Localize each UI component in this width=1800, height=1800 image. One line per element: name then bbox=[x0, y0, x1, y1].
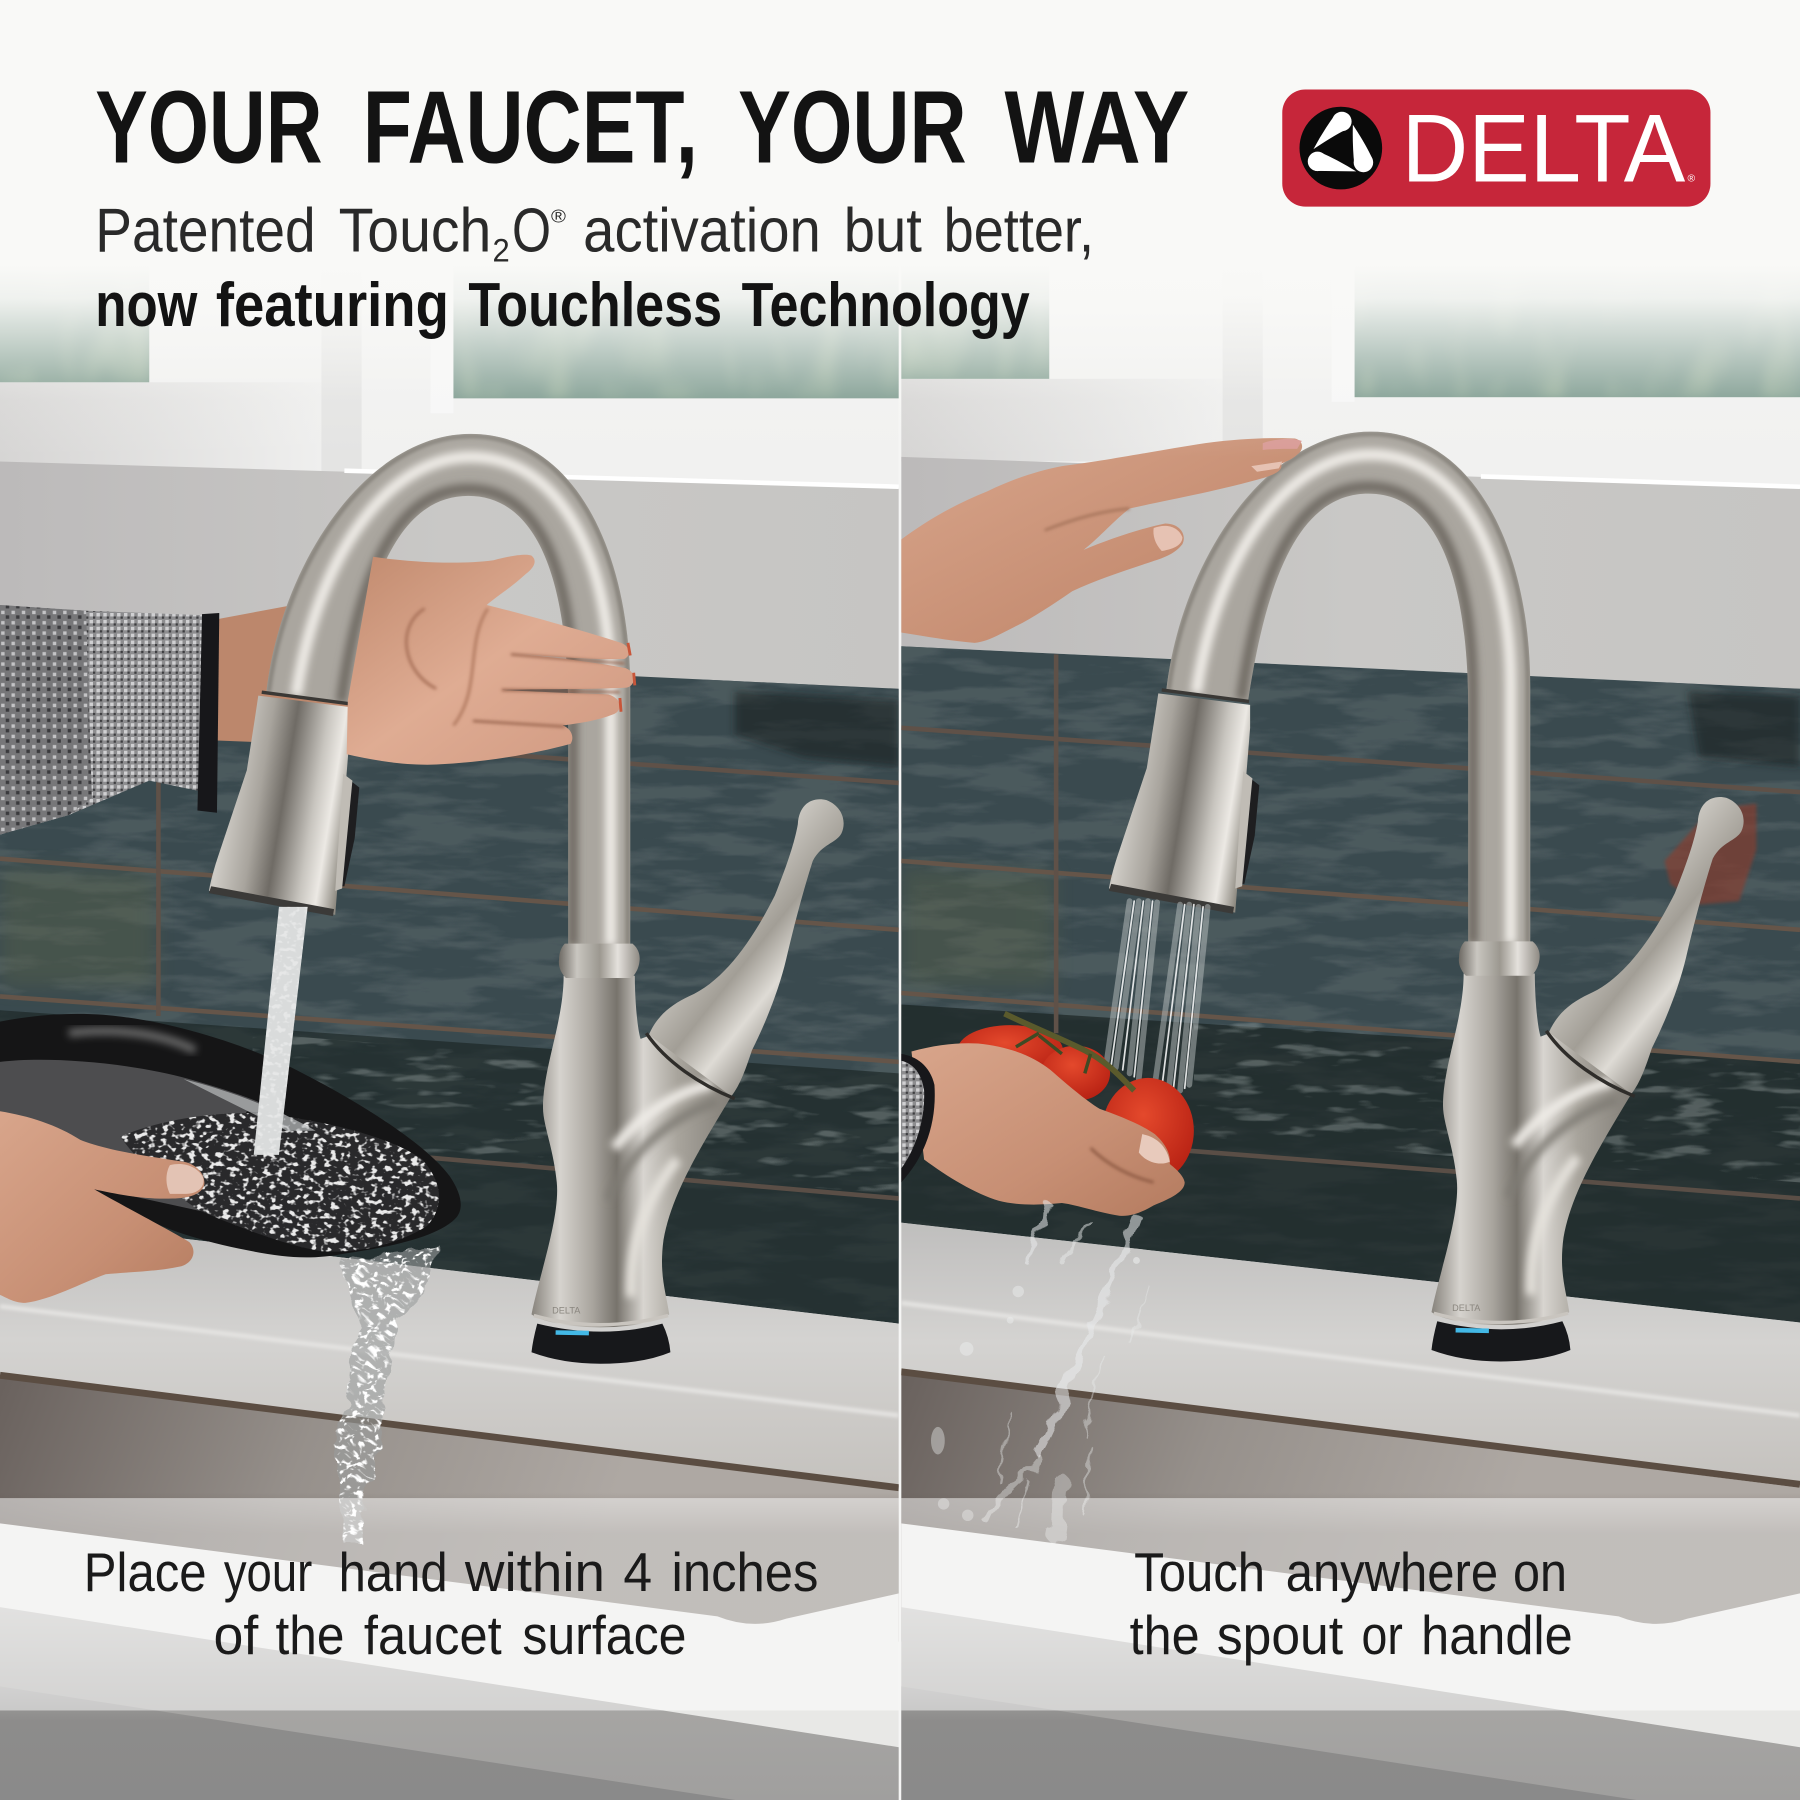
caption: touchless instruction bbox=[84, 1541, 818, 1666]
hand: holding tomatoes bbox=[911, 1043, 1185, 1216]
subtitle line 1: Patented bbox=[95, 196, 316, 265]
subtitle line 1 bbox=[95, 196, 1094, 269]
handle bbox=[649, 799, 844, 1096]
countertop bbox=[901, 1223, 1800, 1488]
handle ring bbox=[646, 1033, 735, 1099]
title: FAUCET, bbox=[363, 68, 698, 184]
subtitle line 1: ® bbox=[551, 206, 566, 227]
faucet: stainless pull-down kitchen faucet bbox=[209, 434, 844, 1364]
caption: touchless instruction: faucet bbox=[364, 1604, 502, 1666]
gooseneck spout bbox=[266, 434, 630, 946]
touch indicator light bbox=[556, 1330, 589, 1335]
caption: touchless instruction: Place bbox=[84, 1541, 207, 1603]
black base bbox=[532, 1324, 670, 1364]
sink rim bbox=[901, 1523, 1800, 1800]
caption band left bbox=[0, 1498, 899, 1710]
caption: touch instruction: on bbox=[1513, 1541, 1567, 1603]
sleeve pattern bbox=[901, 1061, 924, 1169]
window sill highlight bbox=[1481, 476, 1800, 487]
subtitle line 1: 2 bbox=[492, 233, 510, 269]
caption: touch instruction: spout bbox=[1217, 1604, 1343, 1666]
basin shadow bbox=[34, 1507, 899, 1624]
caption: touchless instruction: your bbox=[224, 1541, 312, 1603]
caption: touchless instruction: 4 bbox=[623, 1541, 652, 1603]
caption: touchless instruction: inches bbox=[672, 1541, 818, 1603]
caption: touch instruction: handle bbox=[1421, 1604, 1573, 1666]
window view: greenery bbox=[0, 288, 899, 398]
logo wordmark: DELTA bbox=[1402, 95, 1686, 202]
sink floor bbox=[0, 1703, 734, 1800]
caption: touchless instruction: within bbox=[464, 1541, 605, 1603]
water pooling on plate bbox=[121, 1113, 439, 1252]
window frame bbox=[901, 172, 1800, 494]
registered mark: ® bbox=[1688, 173, 1696, 184]
tile backsplash bbox=[901, 646, 1800, 1322]
spray head button bbox=[340, 776, 359, 886]
sink floor bbox=[901, 1686, 1800, 1800]
countertop bbox=[0, 1217, 899, 1490]
counter edge highlight bbox=[0, 1306, 899, 1415]
title: WAY bbox=[1004, 68, 1189, 184]
water stream from spray head bbox=[254, 907, 308, 1155]
title: YOUR bbox=[738, 68, 967, 184]
subtitle line 1: but bbox=[844, 196, 922, 265]
sink rim bbox=[0, 1523, 899, 1747]
subtitle line 2: Technology bbox=[742, 271, 1030, 340]
water falling from plate bbox=[333, 1246, 440, 1544]
subtitle line 1: O bbox=[512, 196, 551, 265]
caption: touchless instruction: surface bbox=[522, 1604, 686, 1666]
subtitle line 1: activation bbox=[583, 196, 821, 265]
subtitle line 2 bbox=[95, 271, 1030, 340]
title: YOUR bbox=[95, 68, 323, 184]
faucet body bbox=[532, 976, 731, 1327]
caption: touch instruction: or bbox=[1361, 1604, 1403, 1666]
collar bbox=[559, 944, 640, 978]
caption: touch instruction: Touch bbox=[1134, 1541, 1265, 1603]
caption: touchless instruction: of bbox=[214, 1604, 259, 1666]
hand: holding plate bbox=[0, 1111, 204, 1303]
top white fade bbox=[0, 0, 1800, 482]
base logo text: DELTA bbox=[552, 1305, 581, 1315]
panel: left scene with touchless activation bbox=[0, 172, 899, 1800]
caption band right bbox=[901, 1498, 1800, 1710]
wall bbox=[0, 461, 899, 695]
water falling from hand with droplets bbox=[931, 1205, 1148, 1538]
subtitle line 2: Touchless bbox=[468, 271, 722, 340]
plate: black dish bbox=[0, 1014, 461, 1257]
spray head bbox=[209, 692, 352, 916]
caption: touch instruction bbox=[1130, 1541, 1573, 1666]
logo: Delta badge bbox=[1282, 90, 1710, 207]
faucet: same stainless faucet, right panel bbox=[1109, 432, 1744, 1361]
hand: touching the spout bbox=[901, 438, 1302, 643]
arm: sleeve and wrist behind the spout bbox=[0, 597, 367, 835]
hand: open palm near spout bbox=[347, 555, 635, 765]
wall bbox=[901, 457, 1800, 689]
caption: touch instruction: anywhere bbox=[1286, 1541, 1498, 1603]
sink front face bbox=[901, 1607, 1800, 1800]
red tile patch bbox=[1665, 804, 1756, 905]
caption: touchless instruction: hand bbox=[339, 1541, 448, 1603]
subtitle line 2: now bbox=[95, 271, 198, 340]
subtitle line 2: featuring bbox=[216, 271, 449, 340]
water spray streams bbox=[1107, 901, 1208, 1091]
title bbox=[95, 68, 1189, 184]
shirt cuff bbox=[901, 1054, 935, 1182]
sink front face bbox=[0, 1607, 899, 1800]
caption: touch instruction: the bbox=[1130, 1604, 1200, 1666]
counter seam bbox=[901, 1372, 1800, 1484]
caption: touchless instruction: the bbox=[276, 1604, 344, 1666]
center divider bbox=[899, 0, 901, 1800]
sink basin wall bbox=[0, 1378, 899, 1642]
tile backsplash bbox=[0, 646, 899, 1324]
icon: Delta triangle mark bbox=[1299, 107, 1382, 189]
counter seam bbox=[0, 1375, 899, 1488]
tomatoes on the vine bbox=[957, 1014, 1194, 1184]
subtitle line 1: better, bbox=[944, 196, 1094, 265]
panel: right scene with touch activation bbox=[901, 172, 1800, 1800]
basin shadow bbox=[901, 1492, 1800, 1642]
window view: greenery bbox=[901, 172, 1800, 397]
subtitle line 1: Touch bbox=[339, 196, 491, 265]
window frame bbox=[0, 338, 362, 472]
window sill highlight bbox=[344, 471, 899, 487]
counter edge highlight bbox=[901, 1303, 1800, 1415]
sink basin wall bbox=[901, 1374, 1800, 1642]
